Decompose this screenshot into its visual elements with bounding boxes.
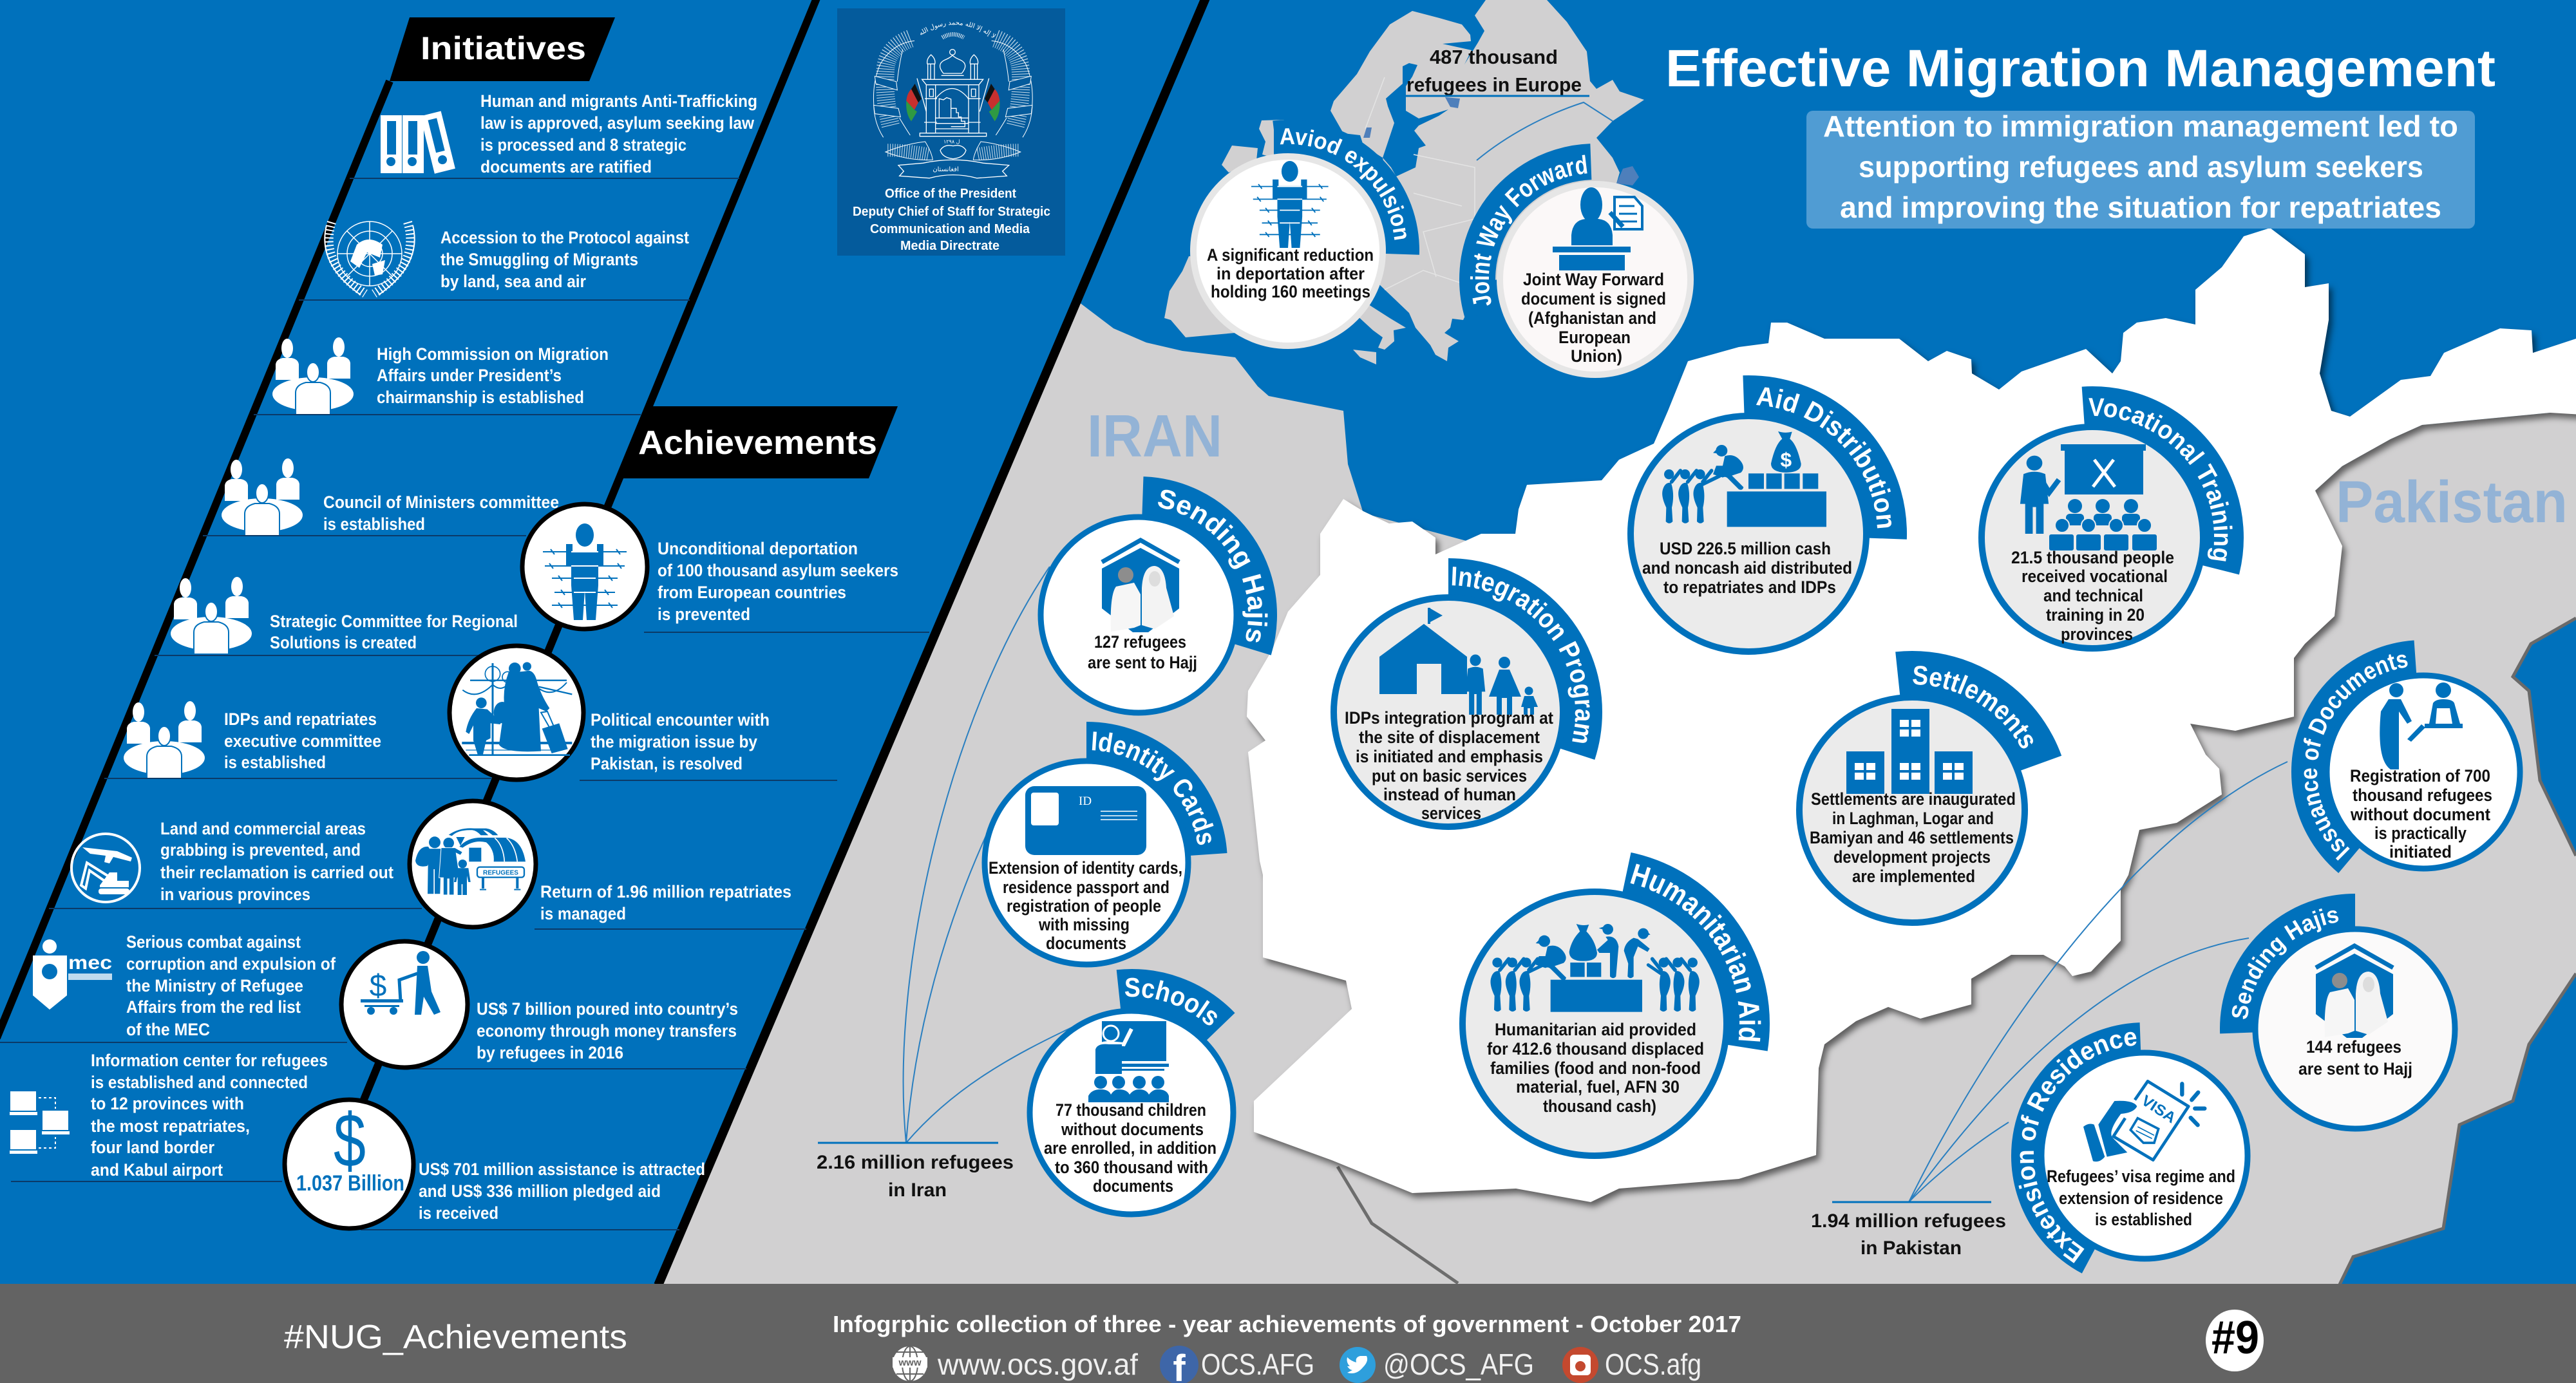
subtitle box: and improving the situation for repatriates: [1840, 191, 2441, 224]
initiative: anti-trafficking law: law is approved, asylum seeking law: [480, 113, 755, 133]
achievement: Pakistan encounter: the migration issue by: [591, 732, 757, 751]
initiative: anti-trafficking law: Human and migrants Anti-Trafficking: [480, 91, 757, 111]
callout: Vocational Training: [1978, 386, 2244, 652]
icon: facebook: [1160, 1346, 1198, 1383]
icon: migrant family at fence: [450, 646, 583, 780]
label: refugees in Pakistan: 1.94 million refugees: [1811, 1210, 2006, 1232]
initiative: executive committee: IDPs and repatriates: [224, 710, 377, 729]
icon: instagram: [1562, 1347, 1598, 1383]
refugee count arcs: Iran: [904, 567, 1075, 1143]
callout: Avoid expulsion: in deportation after: [1217, 264, 1365, 283]
icon: national emblem: افغانستان: [933, 166, 959, 173]
icon: humanitarian aid distribution: [1490, 924, 1700, 1012]
icon: ID card: ID: [1079, 795, 1092, 808]
hashtag: #NUG_Achievements: [284, 1319, 627, 1356]
callout: Schools: are enrolled, in addition: [1044, 1138, 1217, 1158]
callout: Joint Way Forward: document is signed: [1521, 289, 1666, 308]
achievement: assistance attracted: and US$ 336 million pledged aid: [419, 1181, 661, 1201]
icon: aid being handed out: $: [1781, 448, 1792, 471]
initiative: smuggling protocol: Accession to the Protocol against: [440, 228, 689, 247]
icon: MEC logo: [33, 939, 112, 1010]
callout: Joint Way Forward: (Afghanistan and: [1528, 308, 1656, 328]
callout: Humanitarian Aid: for 412.6 thousand displaced: [1487, 1039, 1704, 1058]
icon: emblem flags: [906, 84, 999, 121]
initiative: high commission: High Commission on Migration: [377, 344, 609, 364]
callout: Integration Program: is initiated and emphasis: [1356, 747, 1543, 766]
subtitle box: supporting refugees and asylum seekers: [1859, 150, 2423, 183]
callout: Avoid expulsion: Aviod expulsion: [1280, 128, 1406, 240]
achievement: deportation prevented: is prevented: [658, 605, 750, 624]
callout: Issuance of Documents: [2291, 640, 2523, 873]
callout: Vocational Training: received vocational: [2022, 567, 2168, 586]
callout: Schools: to 360 thousand with: [1055, 1158, 1208, 1177]
callout: Vocational Training: provinces: [2061, 625, 2133, 644]
title: Effective Migration Management: [1665, 39, 2496, 98]
initiative: anti-corruption: the Ministry of Refugee: [126, 976, 303, 995]
callout: Identity Cards: residence passport and: [1003, 878, 1170, 897]
icon: national emblem: ل ١٢٩٨: [943, 138, 960, 144]
label: refugees in Pakistan: in Pakistan: [1861, 1237, 1962, 1259]
callout: Joint Way Forward: Joint Way Forward: [1523, 270, 1664, 289]
callout: Settlements: Settlements are inaugurated: [1811, 789, 2016, 809]
achievement: money transfers: economy through money transfers: [477, 1021, 737, 1040]
callout: Integration Program: put on basic services: [1372, 766, 1527, 786]
icon: binders: [381, 111, 455, 174]
callout: Settlements: Bamiyan and 46 settlements: [1810, 828, 2014, 847]
callout: Aid Distribution: USD 226.5 million cash: [1660, 539, 1831, 558]
callout: Humanitarian Aid: families (food and non-food: [1490, 1058, 1701, 1078]
callout: Extension of Residence: Extension of Residence: [2018, 1031, 2137, 1263]
facebook handle: OCS.AFG: [1201, 1348, 1314, 1381]
achievement: assistance attracted: is received: [419, 1203, 498, 1223]
initiative: land grabbing: their reclamation is carried out: [160, 863, 393, 882]
initiative: smuggling protocol: [299, 221, 690, 300]
heading: Achievements: Achievements: [638, 424, 877, 462]
achievement: repatriates return: Return of 1.96 million repatriates: [540, 882, 791, 901]
icon: committee people: [124, 701, 205, 778]
achievement: deportation prevented: Unconditional deportation: [658, 539, 858, 558]
initiative: council of ministers: is established: [323, 514, 425, 534]
callout: Extension of Residence: extension of residence: [2059, 1189, 2223, 1208]
callout: Sending Hajis, Pakistan: 144 refugees: [2306, 1037, 2401, 1057]
icon: networked computers: [10, 1091, 70, 1154]
icon: 1.037 billion dollar badge: $: [334, 1098, 366, 1183]
initiative: land grabbing: in various provinces: [160, 885, 310, 904]
callout: Vocational Training: and technical: [2043, 586, 2143, 605]
callout: Sending Hajis, Pakistan: [2226, 901, 2477, 1151]
initiative: executive committee: [104, 701, 491, 778]
initiative: executive committee: is established: [224, 753, 326, 772]
callout: Integration Program: Integration Program: [1452, 567, 1590, 743]
achievement: assistance attracted: [285, 1098, 705, 1230]
callout: Settlements: Settlements: [1913, 666, 2033, 748]
achievement: money transfers: [341, 941, 746, 1069]
initiative: land grabbing: [49, 819, 422, 908]
achievement: Pakistan encounter: Political encounter with: [591, 710, 770, 729]
label: refugees in Iran: [817, 1143, 1014, 1201]
diagonal divider lines: [0, 0, 1206, 1285]
callout: Humanitarian Aid: [1459, 852, 1770, 1159]
icon: Hajj pilgrims: [2316, 946, 2393, 1038]
footer caption: Infogrphic collection of three - year achievements of government - October 2017: [833, 1311, 1741, 1337]
logo panel: Office of the President: Communication and Media: [870, 222, 1030, 236]
achievement: deportation prevented: [522, 504, 929, 632]
callout: Identity Cards: registration of people: [1007, 896, 1161, 916]
icon: person behind barbed wire: [1251, 161, 1329, 248]
initiative: anti-corruption: of the MEC: [126, 1020, 210, 1039]
callout: Joint Way Forward: Union): [1571, 346, 1622, 366]
callout: Extension of Residence: [1985, 996, 2304, 1315]
callout: Issuance of Documents: Registration of 700: [2350, 766, 2490, 786]
callout: Schools: without documents: [1061, 1120, 1204, 1139]
callout: Issuance of Documents: thousand refugees: [2353, 786, 2492, 805]
heading: Initiatives: [390, 17, 615, 81]
logo panel: Office of the President: Office of the President: [885, 187, 1016, 201]
icon: apartment buildings: [1846, 709, 1973, 794]
subtitle box: [1806, 109, 2475, 229]
website address: www.ocs.gov.af: [937, 1348, 1138, 1381]
country label: Iran: IRAN: [1087, 402, 1222, 469]
achievement: repatriates return: is managed: [540, 904, 626, 923]
icon: aid being handed out: [1662, 431, 1826, 527]
callout: Aid Distribution: Aid Distribution: [1756, 388, 1891, 528]
callout: Identity Cards: [981, 722, 1227, 967]
initiative: strategic committee: Strategic Committee for Regional: [270, 612, 518, 631]
icon: person signing at desk: [1553, 187, 1642, 270]
icon: man pushing dollar cart: $: [370, 969, 386, 1003]
callout: Sending Hajis, Pakistan: are sent to Hajj: [2298, 1059, 2412, 1078]
icon: committee people: [272, 337, 354, 415]
callout: Extension of Residence: is established: [2095, 1210, 2192, 1229]
label: refugees in Pakistan: [1811, 1202, 2006, 1259]
label: refugees in Europe: refugees in Europe: [1406, 73, 1582, 96]
heading: Achievements: [622, 406, 898, 478]
map: Iran and Pakistan land: [657, 302, 2576, 1284]
initiative: information center: four land border: [91, 1138, 214, 1157]
initiative: anti-corruption: corruption and expulsion of: [126, 954, 336, 974]
callout: Identity Cards: documents: [1046, 934, 1126, 953]
icon: Hajj pilgrims: [1102, 540, 1179, 632]
initiative: council of ministers: [203, 458, 559, 536]
callout: Humanitarian Aid: material, fuel, AFN 30: [1516, 1077, 1680, 1096]
initiative: high commission: [254, 337, 641, 415]
label: refugees in Iran: 2.16 million refugees: [817, 1152, 1014, 1173]
achievement: Pakistan encounter: Pakistan, is resolved: [591, 754, 743, 773]
initiative: anti-trafficking law: documents are ratified: [480, 157, 652, 176]
initiative: information center: to 12 provinces with: [91, 1094, 244, 1113]
callout: Humanitarian Aid: Humanitarian aid provided: [1495, 1020, 1696, 1039]
icon: ID card: [1025, 786, 1146, 855]
refugee count arcs: Pakistan: [1909, 762, 2287, 1202]
callout: Identity Cards: Identity Cards: [1092, 731, 1213, 845]
label: refugees in Europe: [1403, 46, 1589, 96]
callout: Issuance of Documents: is practically: [2374, 823, 2467, 843]
callout: Issuance of Documents: Issuance of Documents: [2304, 654, 2407, 861]
icon: national emblem: لا إله إلا الله محمد رسول الله: [920, 22, 996, 37]
icon: trainer and audience: [2020, 444, 2157, 551]
icon: national emblem: [873, 22, 1033, 179]
initiative: anti-corruption: Affairs from the red list: [126, 997, 301, 1017]
map: Europe: [1164, 0, 1644, 364]
initiative: executive committee: executive committee: [224, 731, 381, 751]
callout: Sending Hajis, Iran: Sending Hajis: [1158, 489, 1267, 643]
achievement: money transfers: by refugees in 2016: [477, 1043, 623, 1062]
achievement: repatriates return: [410, 801, 806, 929]
callout: Integration Program: [1331, 558, 1602, 830]
callout: Settlements: [1796, 651, 2062, 926]
icon: committee people: [171, 577, 252, 654]
label: refugees in Iran: in Iran: [888, 1180, 947, 1201]
achievement: deportation prevented: from European countries: [658, 583, 846, 602]
icon: house and family: [1379, 608, 1538, 715]
callout: Identity Cards: with missing: [1038, 915, 1130, 934]
map: Afghanistan: [1247, 228, 2576, 1202]
achievement: assistance attracted: US$ 701 million assistance is attracted: [419, 1160, 705, 1179]
icon: twitter: [1340, 1347, 1376, 1383]
callout: Sending Hajis, Pakistan: Sending Hajis: [2232, 908, 2339, 1019]
initiative: information center: and Kabul airport: [91, 1160, 223, 1180]
twitter handle: @OCS_AFG: [1383, 1348, 1534, 1381]
callout: Settlements: in Laghman, Logar and: [1832, 809, 1994, 828]
achievement: Pakistan encounter: [450, 646, 837, 780]
logo panel: Office of the President: Deputy Chief of Staff for Strategic: [853, 205, 1050, 219]
callout: Schools: documents: [1093, 1176, 1173, 1196]
initiative: land grabbing: Land and commercial areas: [160, 819, 366, 838]
footer bar: [0, 1284, 2576, 1383]
initiative: information center: is established and connected: [91, 1073, 308, 1092]
initiative: land grabbing: grabbing is prevented, and: [160, 840, 361, 860]
callout: Aid Distribution: and noncash aid distributed: [1642, 558, 1852, 578]
logo panel: Office of the President: [837, 8, 1065, 256]
callout: Aid Distribution: to repatriates and IDPs: [1663, 578, 1836, 597]
initiative: anti-corruption: [0, 932, 347, 1042]
icon: MEC logo: mec: [68, 952, 112, 974]
initiative: information center: the most repatriates,: [91, 1116, 250, 1136]
icon: committee people: [222, 458, 303, 536]
icon: person behind barbed wire: [522, 504, 647, 629]
callout: Settlements: are implemented: [1852, 867, 1975, 886]
initiative: high commission: chairmanship is established: [377, 388, 584, 407]
achievement: money transfers: US$ 7 billion poured into country’s: [477, 999, 738, 1019]
icon: visa passport in hand: VISA: [2139, 1092, 2179, 1126]
callout: Identity Cards: Extension of identity cards,: [989, 858, 1182, 878]
callout: Integration Program: services: [1421, 804, 1481, 823]
callout: Avoid expulsion: holding 160 meetings: [1211, 282, 1370, 301]
initiative: council of ministers: Council of Ministers committee: [323, 493, 559, 512]
initiative: anti-trafficking law: is processed and 8 strategic: [480, 135, 687, 155]
icon: 1.037 billion dollar badge: [285, 1098, 413, 1228]
callout: Humanitarian Aid: Humanitarian Aid: [1631, 864, 1761, 1042]
callout: Issuance of Documents: without document: [2350, 805, 2490, 824]
callout: Integration Program: instead of human: [1383, 785, 1516, 804]
callout: Schools: 77 thousand children: [1056, 1100, 1206, 1120]
callout: Joint Way Forward: Joint Way Forward: [1470, 155, 1587, 306]
icon: 1.037 billion dollar badge: 1.037 Billion: [296, 1171, 404, 1196]
callout: Integration Program: the site of displacement: [1359, 728, 1540, 747]
callout: Avoid expulsion: [1190, 120, 1419, 349]
icon: gun and excavator: [71, 834, 140, 902]
callout: Humanitarian Aid: thousand cash): [1543, 1096, 1656, 1116]
callout: Settlements: development projects: [1833, 847, 1991, 867]
initiative: information center: Information center for refugees: [91, 1051, 328, 1070]
icon: website globe: www: [898, 1357, 922, 1368]
callout: Issuance of Documents: initiated: [2389, 842, 2452, 861]
icon: man pushing dollar cart: [341, 941, 468, 1068]
callout: Sending Hajis, Iran: are sent to Hajj: [1088, 653, 1197, 672]
icon: classroom: [1088, 1021, 1169, 1102]
initiative: high commission: Affairs under President’s: [377, 366, 562, 385]
icon: refugee family and camp: [410, 801, 536, 927]
icon: document registration: [2380, 682, 2463, 769]
label: refugees in Europe: 487 thousand: [1430, 46, 1558, 68]
callout: Sending Hajis, Iran: 127 refugees: [1094, 632, 1186, 652]
callout: Sending Hajis, Iran: [1038, 476, 1277, 716]
initiative: smuggling protocol: by land, sea and air: [440, 272, 586, 291]
initiative: strategic committee: [155, 577, 518, 655]
callout: Vocational Training: training in 20: [2046, 605, 2145, 625]
callout: Schools: Schools: [1124, 977, 1217, 1025]
icon: UN emblem: [325, 221, 415, 295]
initiative: anti-corruption: Serious combat against: [126, 932, 301, 952]
callout: Integration Program: IDPs integration program at: [1345, 708, 1553, 728]
achievement: deportation prevented: of 100 thousand asylum seekers: [658, 561, 898, 580]
callout: Aid Distribution: [1627, 375, 1907, 655]
callout: Avoid expulsion: A significant reduction: [1207, 245, 1374, 265]
logo panel: Office of the President: Media Directrate: [900, 239, 999, 253]
subtitle box: Attention to immigration management led to: [1823, 109, 2458, 143]
icon: website globe: [893, 1346, 927, 1381]
callout: Joint Way Forward: [1459, 144, 1694, 378]
icon: visa passport in hand: [2083, 1081, 2204, 1162]
callout: Joint Way Forward: European: [1558, 328, 1631, 347]
icon: refugee family and camp: REFUGEES: [483, 869, 518, 876]
initiative: smuggling protocol: the Smuggling of Migrants: [440, 250, 638, 269]
callout: Schools: [1027, 969, 1236, 1217]
issue number badge: #9: [2211, 1312, 2259, 1364]
instagram handle: OCS.afg: [1605, 1348, 1701, 1381]
initiative: strategic committee: Solutions is created: [270, 633, 417, 652]
country label: Pakistan: Pakistan: [2336, 469, 2568, 535]
initiative: information center: [10, 1051, 328, 1181]
callout: Extension of Residence: Refugees’ visa regime and: [2047, 1167, 2235, 1186]
heading: Initiatives: Initiatives: [421, 30, 586, 66]
initiative: anti-trafficking law: [350, 91, 757, 178]
callout: Vocational Training: 21.5 thousand people: [2011, 548, 2174, 567]
callout: Vocational Training: Vocational Training: [2088, 398, 2233, 561]
